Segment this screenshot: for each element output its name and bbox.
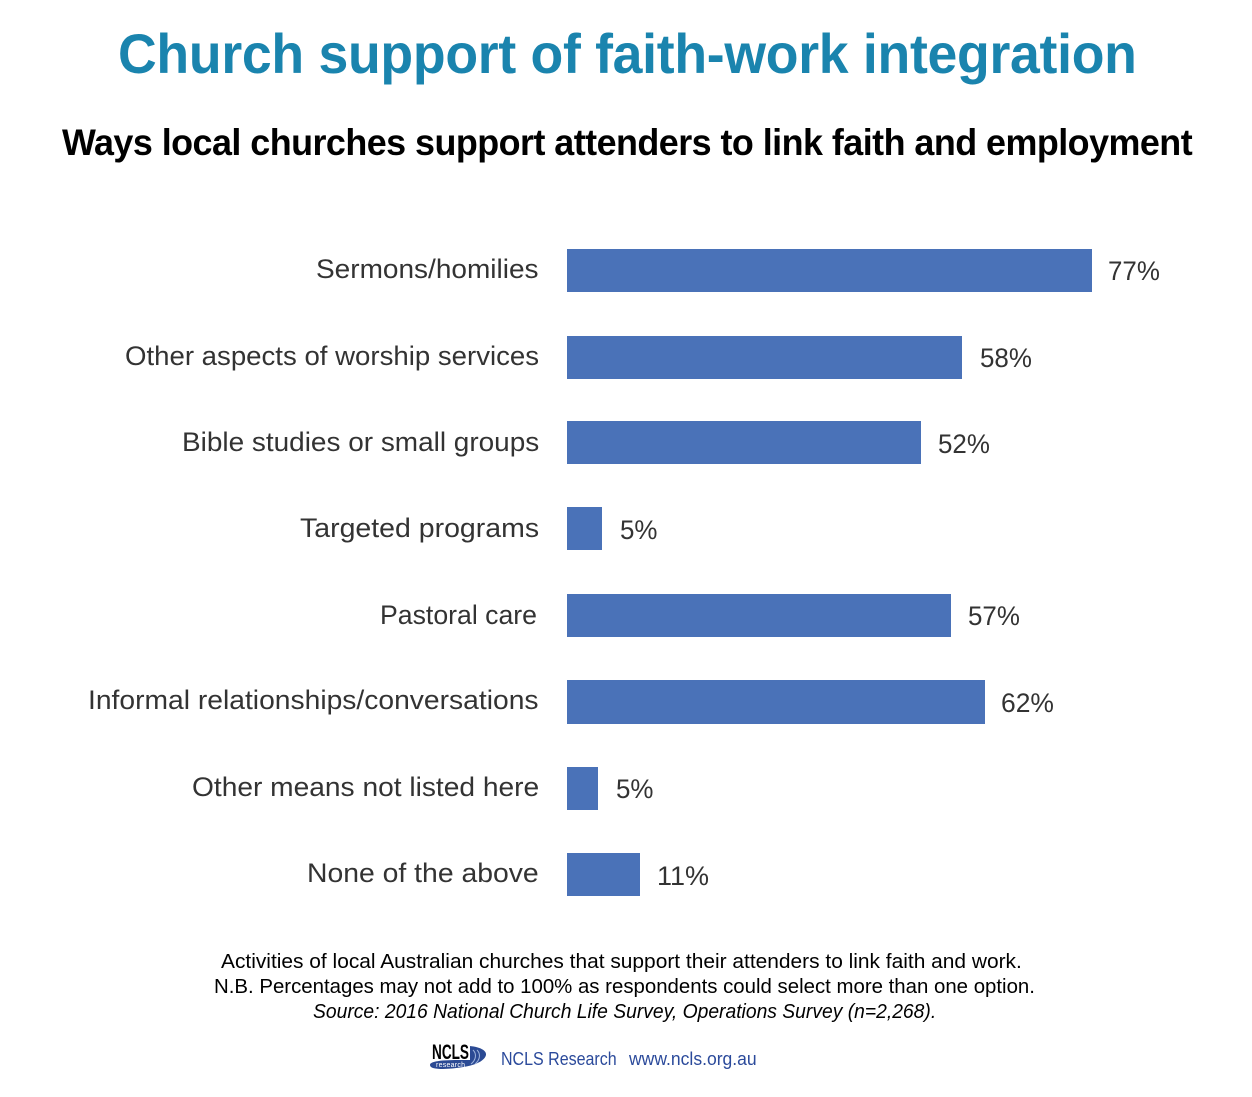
footer website: www.ncls.org.au bbox=[629, 1048, 757, 1069]
row: None of the above bbox=[307, 853, 709, 896]
bar chart bbox=[88, 249, 1160, 896]
row: Sermons/homilies bbox=[316, 249, 1160, 292]
icon: NCLS logo: research bbox=[436, 1062, 465, 1069]
row: Other means not listed here: 5% bbox=[616, 774, 653, 804]
row: Pastoral care: Pastoral care bbox=[380, 600, 537, 630]
row: Sermons/homilies: 77% bbox=[1108, 256, 1160, 286]
subtitle: Ways local churches support attenders to link faith and employment bbox=[62, 122, 1192, 163]
footnote text: Source: 2016 National Church Life Survey, Operations Survey (n=2,268). bbox=[313, 1000, 936, 1023]
row: None of the above: None of the above bbox=[307, 858, 539, 888]
row: Other aspects of worship services: Other aspects of worship services bbox=[125, 341, 539, 371]
row: Bible studies or small groups bbox=[182, 421, 990, 464]
row: Targeted programs bbox=[300, 507, 657, 550]
footer credit: NCLS Research bbox=[501, 1048, 617, 1069]
row: Informal relationships/conversations bbox=[88, 680, 1054, 724]
row: Bible studies or small groups: 52% bbox=[938, 429, 990, 459]
row: Other means not listed here bbox=[192, 767, 653, 810]
row: Informal relationships/conversations: Informal relationships/conversations bbox=[88, 685, 539, 715]
row: Targeted programs: Targeted programs bbox=[300, 513, 539, 543]
row: Sermons/homilies: Sermons/homilies bbox=[316, 254, 539, 284]
title: Church support of faith-work integration bbox=[118, 22, 1137, 85]
row: Informal relationships/conversations: 62% bbox=[1001, 688, 1054, 718]
row: Pastoral care: 57% bbox=[968, 601, 1020, 631]
row: Other aspects of worship services bbox=[125, 336, 1032, 379]
row: Pastoral care bbox=[380, 594, 1020, 637]
row: Bible studies or small groups: Bible studies or small groups bbox=[182, 427, 539, 457]
row: Other aspects of worship services: 58% bbox=[980, 343, 1032, 373]
row: None of the above: 11% bbox=[657, 861, 709, 891]
row: Targeted programs: 5% bbox=[620, 515, 657, 545]
footnote text: N.B. Percentages may not add to 100% as respondents could select more than one option. bbox=[214, 975, 1035, 998]
footnote text bbox=[214, 950, 1035, 1023]
row: Other means not listed here: Other means not listed here bbox=[192, 772, 539, 802]
footnote text: Activities of local Australian churches that support their attenders to link faith and work. bbox=[221, 950, 1022, 973]
